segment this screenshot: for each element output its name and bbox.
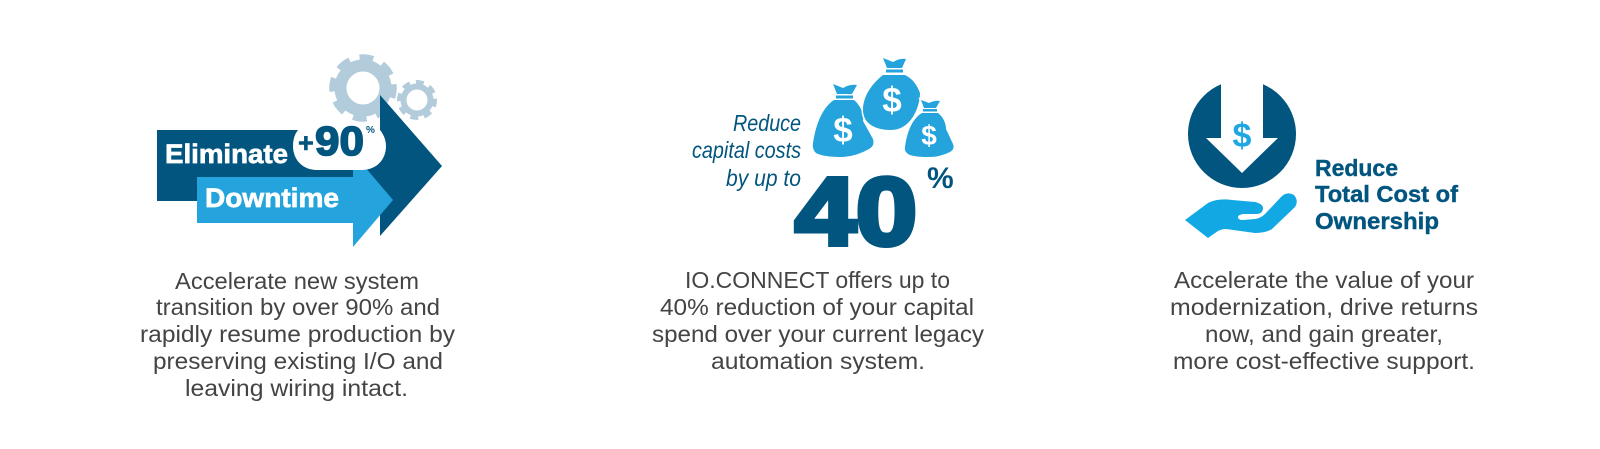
callout: +90% badge bbox=[293, 118, 386, 170]
text block: modernization value: modernization, drive returns bbox=[1170, 294, 1478, 320]
icon: money bag center bbox=[863, 58, 920, 130]
icon: money bag left: $ bbox=[833, 111, 853, 150]
text block: system transition bbox=[140, 268, 456, 401]
heading: Downtime: Downtime bbox=[205, 183, 339, 213]
callout: +90% badge: 90 bbox=[315, 118, 364, 164]
text block: system transition: preserving existing I/O and bbox=[153, 348, 443, 374]
text block: modernization value: more cost-effective support. bbox=[1173, 348, 1475, 374]
icon: money bag left bbox=[813, 84, 874, 157]
panel: capital costs bbox=[652, 58, 985, 374]
text block: system transition: leaving wiring intact. bbox=[185, 375, 408, 401]
text block: system transition: rapidly resume production by bbox=[140, 321, 456, 347]
icon: large gear bbox=[328, 53, 398, 123]
icon: down arrow in circle: $ bbox=[1233, 117, 1252, 155]
figure: 40: 40 bbox=[795, 158, 917, 266]
icon: open hand bbox=[1185, 193, 1297, 238]
icon: down arrow in circle bbox=[1188, 70, 1296, 188]
icon: money bag right: $ bbox=[921, 120, 937, 151]
text block: modernization value: now, and gain greater, bbox=[1205, 321, 1443, 347]
callout: +90% badge: + bbox=[298, 128, 314, 158]
arrow: dark blue bbox=[157, 95, 442, 236]
icon: money bag right bbox=[905, 100, 954, 157]
icon: small gear bbox=[398, 81, 436, 119]
callout: +90% badge: % bbox=[366, 125, 375, 136]
heading: reduce capital costs: capital costs bbox=[692, 137, 801, 163]
heading: reduce capital costs: by up to bbox=[726, 165, 801, 191]
heading: reduce total cost of ownership: Reduce bbox=[1315, 155, 1398, 181]
text block: capital reduction: automation system. bbox=[711, 348, 925, 374]
icon: money bag center: $ bbox=[882, 81, 902, 120]
heading: Eliminate: Eliminate bbox=[165, 139, 288, 169]
text block: system transition: transition by over 90% and bbox=[156, 294, 440, 320]
text block: capital reduction: 40% reduction of your capital bbox=[660, 294, 974, 320]
text block: modernization value bbox=[1170, 267, 1478, 374]
heading: reduce capital costs bbox=[692, 110, 801, 191]
panel: eliminate downtime bbox=[140, 53, 456, 401]
figure: percent sign: % bbox=[927, 162, 954, 195]
heading: reduce capital costs: Reduce bbox=[733, 110, 801, 136]
panel: total cost of ownership bbox=[1170, 70, 1478, 374]
text block: system transition: Accelerate new system bbox=[175, 268, 419, 294]
text block: modernization value: Accelerate the value of your bbox=[1174, 267, 1474, 293]
heading: reduce total cost of ownership: Ownership bbox=[1315, 208, 1439, 234]
text block: capital reduction bbox=[652, 267, 985, 374]
heading: reduce total cost of ownership bbox=[1315, 155, 1458, 234]
text block: capital reduction: IO.CONNECT offers up to bbox=[685, 267, 950, 293]
text block: capital reduction: spend over your current legacy bbox=[652, 321, 985, 347]
arrow: light blue bbox=[197, 153, 393, 247]
heading: reduce total cost of ownership: Total Cost of bbox=[1315, 181, 1458, 207]
